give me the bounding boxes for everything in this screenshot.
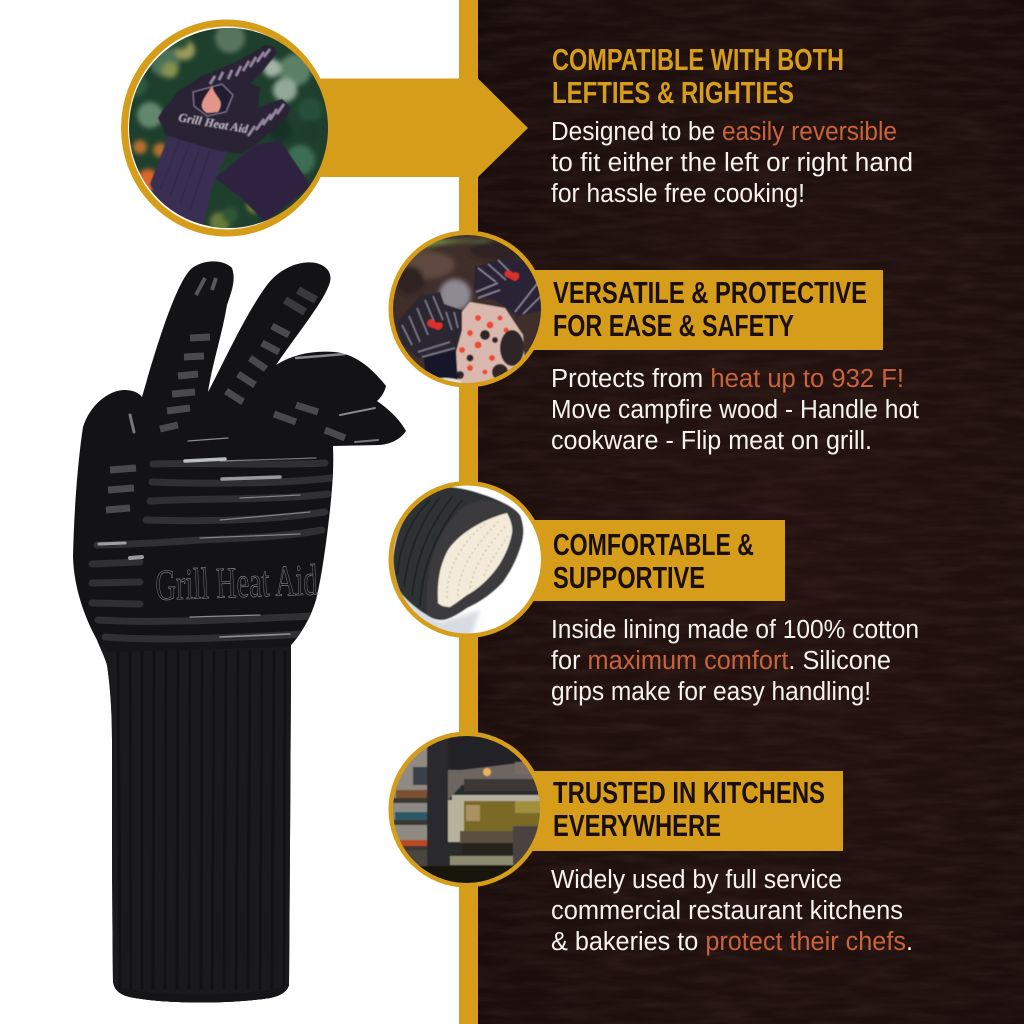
heading: comfortable [553,527,754,595]
text: protection description: Move campfire wood - Handle hot [551,396,919,424]
text: comfort description: Inside lining made of 100% cotton [551,616,919,644]
heading: compatible: COMPATIBLE WITH BOTH [552,42,844,77]
text: trusted description [551,866,913,956]
label bar: versatile [500,270,883,350]
heading: trusted: TRUSTED IN KITCHENS [553,775,825,810]
label bar: comfortable [500,520,785,601]
heading: trusted: EVERYWHERE [553,808,721,843]
text: protection description: cookware - Flip meat on grill. [551,427,872,455]
text: reversible description [551,118,913,208]
icon: photo of reversible gloves [123,23,335,235]
text: comfort description: for maximum comfort. Silicone [551,647,891,675]
icon: cotton lining photo [389,482,545,640]
icon: restaurant kitchen photo [389,732,546,888]
heading: trusted [553,775,825,843]
text: trusted description: Widely used by full service [551,866,842,894]
heading: comfortable: SUPPORTIVE [553,560,705,595]
text: trusted description: commercial restaurant kitchens [551,897,903,925]
heading: versatile [553,275,867,343]
text: reversible description: to fit either the left or right hand [551,149,913,177]
brand text on main glove: Grill Heat Aid [155,555,318,610]
arrow: gold pointer from first photo [320,78,528,177]
heading: compatible [552,42,844,110]
icon: campfire photo [389,231,545,390]
text: trusted description: & bakeries to protect their chefs. [551,928,913,956]
heading: comfortable: COMFORTABLE & [553,527,754,562]
text: protection description [551,365,919,455]
background: dark wood panel [478,0,1024,1024]
glossy highlights [99,354,378,637]
heading: versatile: FOR EASE & SAFETY [553,308,794,343]
cuff body [99,645,291,1002]
text: comfort description: grips make for easy handling! [551,678,871,706]
cuff ribs [118,650,285,990]
palm stripes [92,463,331,639]
text: reversible description: for hassle free cooking! [551,180,805,208]
text: comfort description [551,616,919,706]
finger grip stripes [106,326,345,510]
text: reversible description: Designed to be easily reversible [551,118,897,146]
illustration: main heat glove [73,261,406,1010]
heading: compatible: LEFTIES & RIGHTIES [552,75,794,110]
gold vertical band [459,0,478,1024]
label bar: trusted [500,771,843,851]
brand text on glove: Grill Heat Aid [177,110,250,136]
text: protection description: Protects from heat up to 932 F! [551,365,904,393]
heading: versatile: VERSATILE & PROTECTIVE [553,275,867,310]
